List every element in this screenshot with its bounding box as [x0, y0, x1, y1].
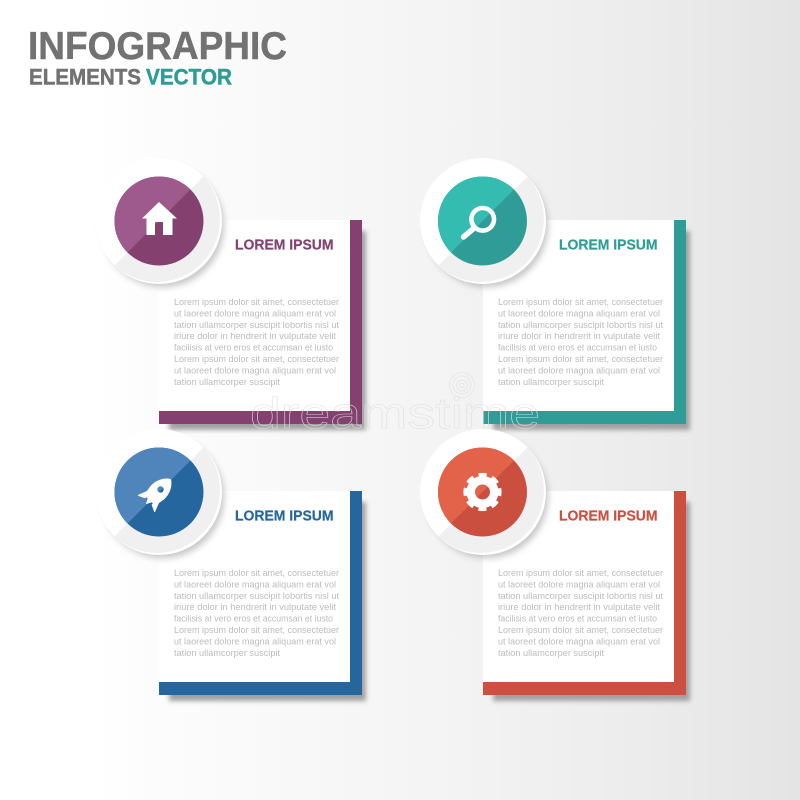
text block: red: iriure dolor in hendrerit in vulputate velit	[498, 602, 661, 612]
badge: blue circle	[96, 429, 224, 558]
title	[28, 25, 287, 90]
text block: purple: tation ullamcorper suscipit lobortis nisl ut	[174, 320, 340, 330]
text block: blue: Lorem ipsum dolor sit amet, consectetuer	[174, 625, 339, 635]
text block: purple: tation ullamcorper suscipit	[174, 377, 281, 387]
text block: red: ut laoreet dolore magna aliquam erat vol	[498, 636, 660, 646]
text block: teal: ut laoreet dolore magna aliquam erat vol	[498, 365, 660, 375]
panel: red card	[420, 429, 690, 701]
text block: purple: ut laoreet dolore magna aliquam erat vol	[174, 308, 336, 318]
text block: teal: facilisis at vero eros et accumsan et iusto	[498, 343, 657, 353]
text block: purple: Lorem ipsum dolor sit amet, consectetuer	[174, 354, 339, 364]
text block: teal: iriure dolor in hendrerit in vulputate velit	[498, 331, 661, 341]
text block: teal: ut laoreet dolore magna aliquam erat vol	[498, 308, 660, 318]
text block: red: Lorem ipsum dolor sit amet, consectetuer	[498, 568, 663, 578]
panel: blue card	[96, 429, 366, 701]
text block: blue: iriure dolor in hendrerit in vulputate velit	[174, 602, 337, 612]
text block: purple: facilisis at vero eros et accumsan et iusto	[174, 343, 333, 353]
text block: red: ut laoreet dolore magna aliquam erat vol	[498, 579, 660, 589]
icon: gear	[465, 475, 500, 509]
icon: watermark spiral	[450, 372, 474, 398]
title: ELEMENTS	[29, 64, 141, 90]
watermark: dreamstime	[250, 389, 540, 438]
icon: house	[142, 202, 177, 235]
text block: red: Lorem ipsum dolor sit amet, consectetuer	[498, 625, 663, 635]
panel: purple card	[96, 158, 366, 430]
text block: blue: tation ullamcorper suscipit lobortis nisl ut	[174, 591, 340, 601]
title: INFOGRAPHIC	[28, 25, 287, 68]
watermark	[250, 372, 540, 438]
text block: teal	[498, 297, 664, 387]
panel: teal card	[420, 158, 690, 430]
text block: teal: Lorem ipsum dolor sit amet, consectetuer	[498, 354, 663, 364]
heading: red: LOREM IPSUM	[559, 508, 658, 524]
heading: teal: LOREM IPSUM	[559, 238, 658, 254]
heading: blue: LOREM IPSUM	[235, 508, 334, 524]
badge: teal circle	[420, 158, 548, 287]
text block: purple: Lorem ipsum dolor sit amet, consectetuer	[174, 297, 339, 307]
title: VECTOR	[146, 64, 232, 90]
badge: red circle	[420, 429, 548, 558]
text block: purple	[174, 297, 340, 387]
icon: rocket	[138, 471, 179, 512]
icon: magnifier	[464, 208, 494, 237]
text block: red: facilisis at vero eros et accumsan et iusto	[498, 614, 657, 624]
text block: teal: Lorem ipsum dolor sit amet, consectetuer	[498, 297, 663, 307]
text block: blue: tation ullamcorper suscipit	[174, 648, 281, 658]
heading: purple: LOREM IPSUM	[235, 238, 334, 254]
text block: blue: Lorem ipsum dolor sit amet, consectetuer	[174, 568, 339, 578]
text block: teal: tation ullamcorper suscipit lobortis nisl ut	[498, 320, 664, 330]
text block: red: tation ullamcorper suscipit lobortis nisl ut	[498, 591, 664, 601]
text block: red	[498, 568, 664, 658]
text block: red: tation ullamcorper suscipit	[498, 648, 605, 658]
badge: purple circle	[96, 158, 224, 287]
text block: teal: tation ullamcorper suscipit	[498, 377, 605, 387]
text block: purple: ut laoreet dolore magna aliquam erat vol	[174, 365, 336, 375]
text block: purple: iriure dolor in hendrerit in vulputate velit	[174, 331, 337, 341]
text block: blue: ut laoreet dolore magna aliquam erat vol	[174, 636, 336, 646]
text block: blue: facilisis at vero eros et accumsan et iusto	[174, 614, 333, 624]
text block: blue: ut laoreet dolore magna aliquam erat vol	[174, 579, 336, 589]
text block: blue	[174, 568, 340, 658]
